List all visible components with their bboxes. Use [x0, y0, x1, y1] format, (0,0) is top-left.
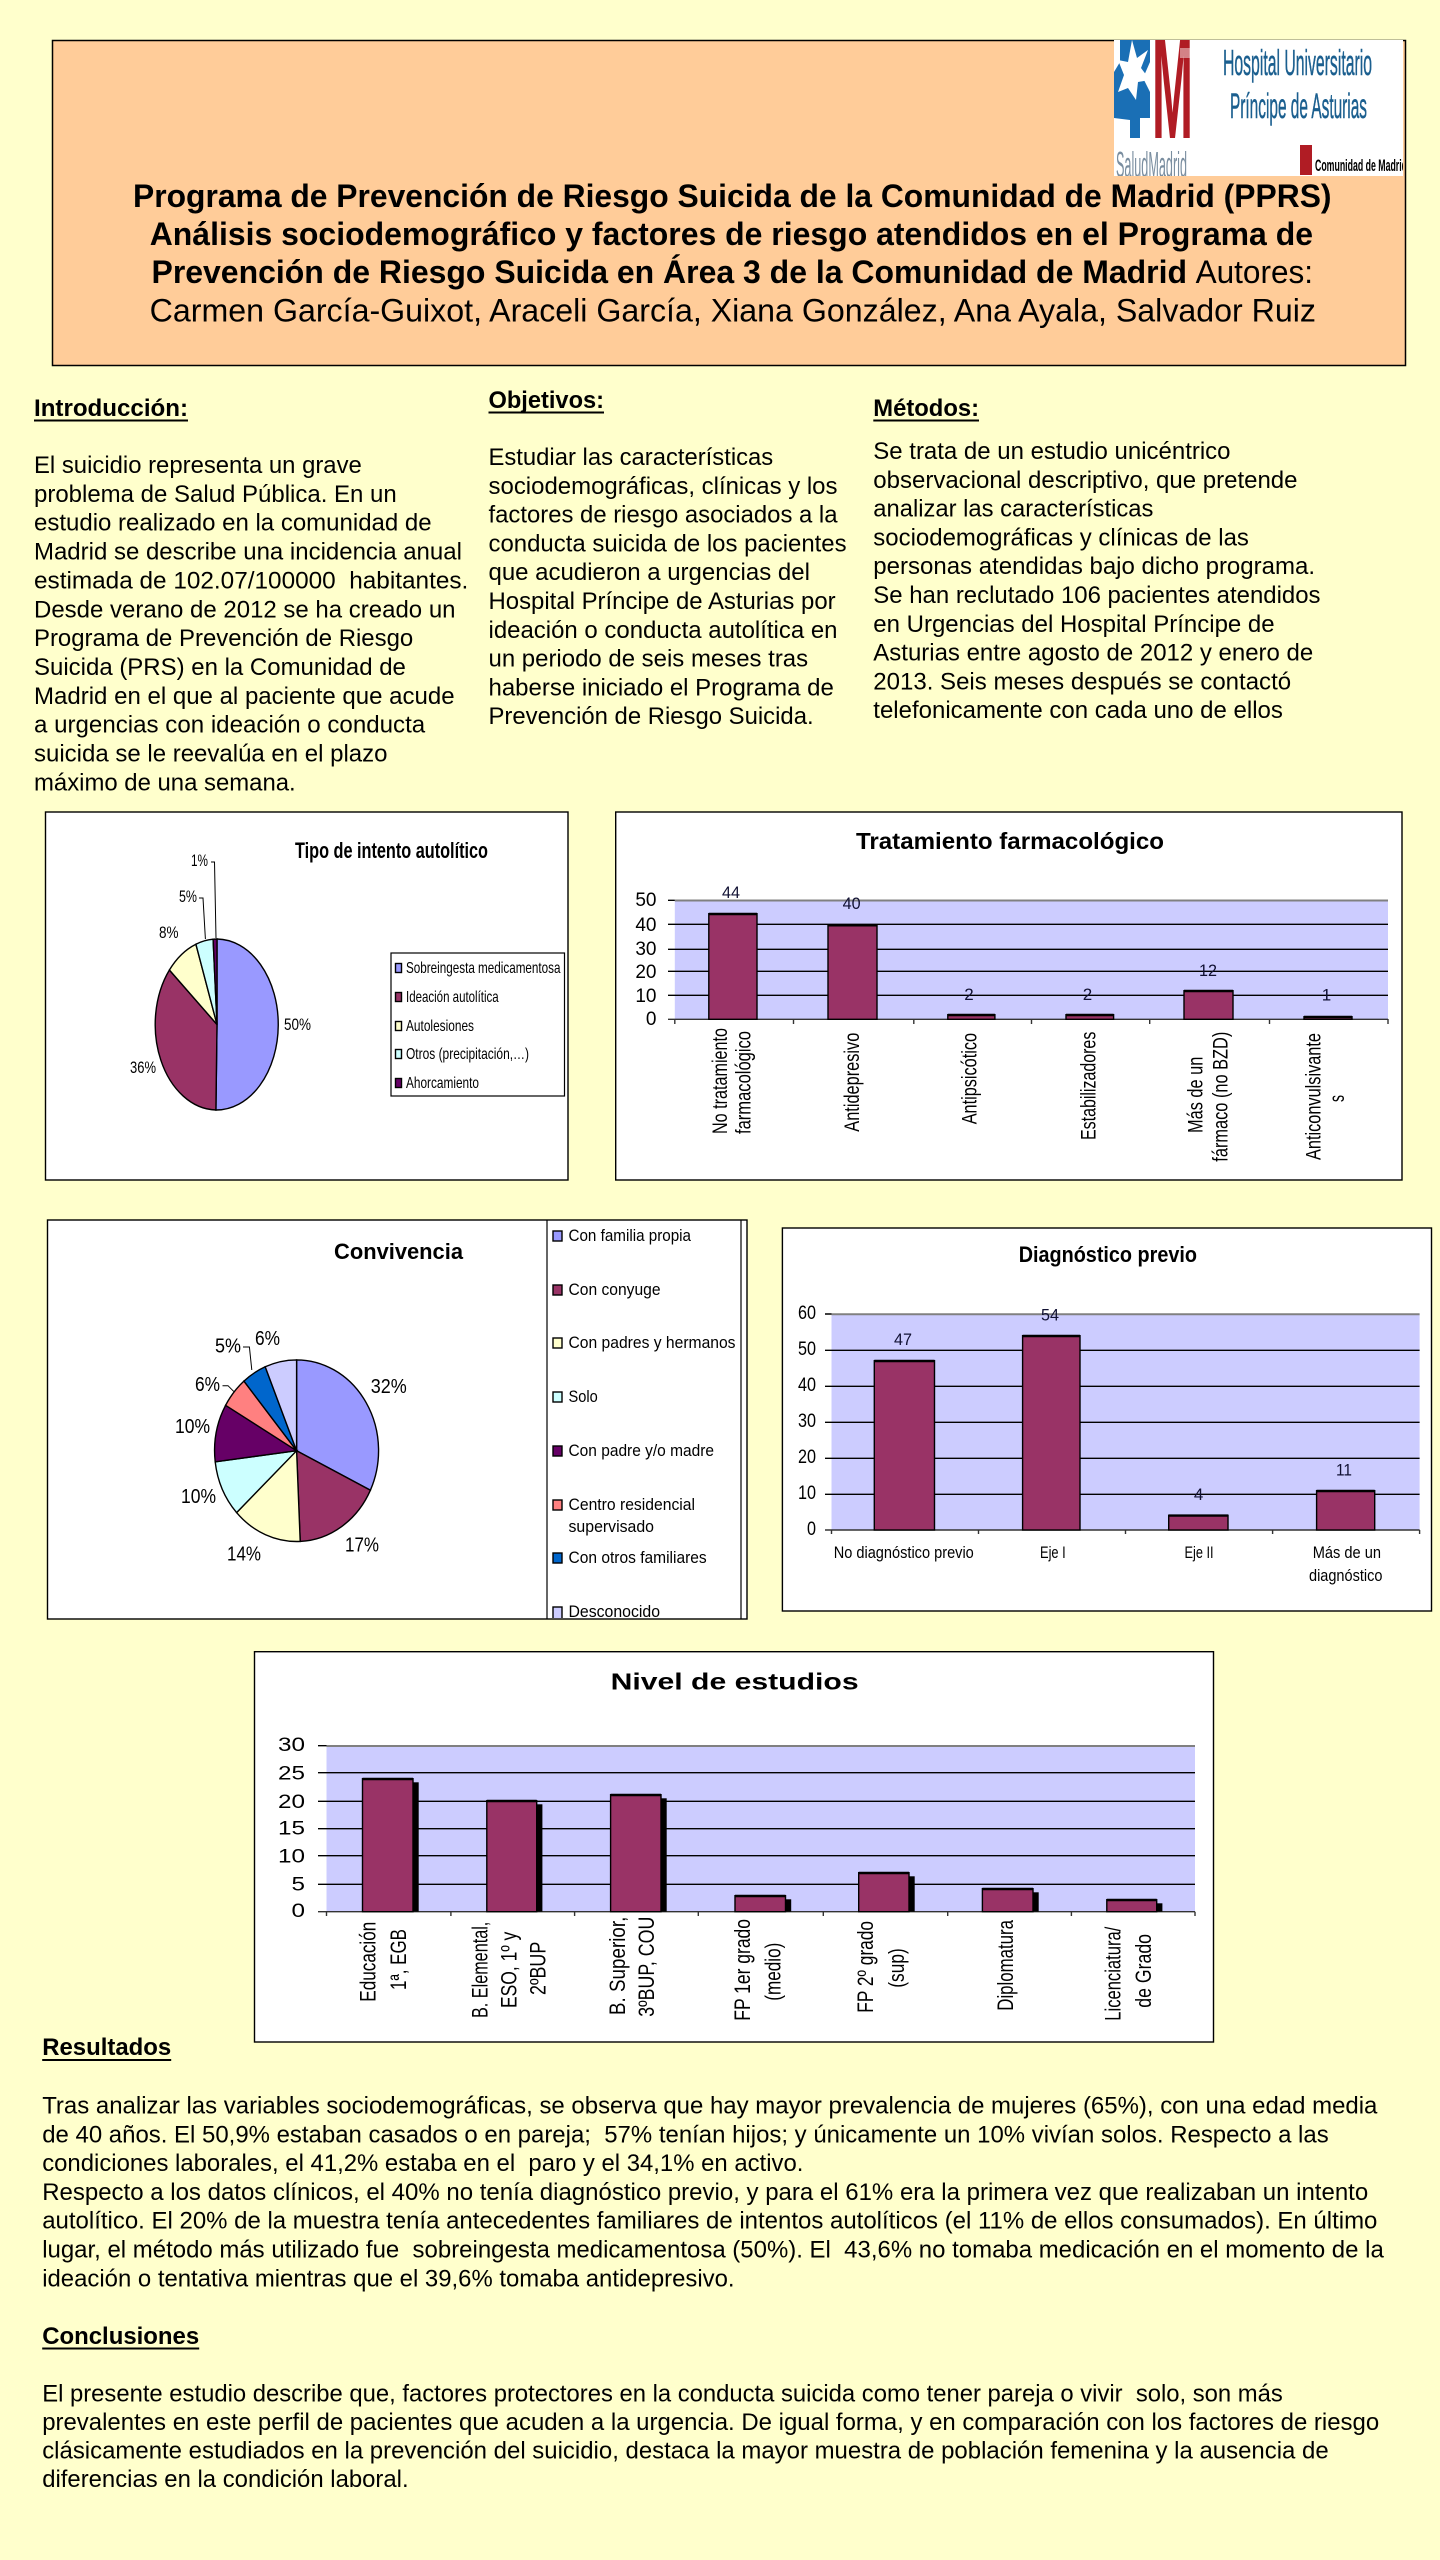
- text block: Introducción: problema de Salud Pública. En un: [34, 481, 397, 508]
- x axis labels: [709, 1028, 1349, 1162]
- title and authors: Prevención de Riesgo Suicida en Área 3 de la Comunidad de Madrid: [152, 254, 1187, 290]
- text block: Objetivos: factores de riesgo asociados a la: [488, 502, 838, 529]
- text block: Resultados: Respecto a los datos clínicos, el 40% no tenía diagnóstico previo, y para el 61% era la primera vez que realizaban un intento: [42, 2179, 1368, 2206]
- chart panel: Diagnóstico previo (bars): Diagnóstico previo: [1019, 1242, 1197, 1267]
- y axis labels: 25: [278, 1764, 305, 1785]
- pie percentage labels: 50%: [284, 1015, 311, 1034]
- x axis labels: ESO, 1º y: [496, 1932, 522, 2008]
- pie percentage labels: 36%: [130, 1058, 156, 1077]
- pie percentage labels: 6%: [255, 1328, 280, 1350]
- chart panel: Tratamiento farmacológico (bars): Tratamiento farmacológico: [856, 828, 1164, 854]
- y axis labels: 20: [798, 1447, 816, 1468]
- x axis labels: fármaco (no BZD): [1210, 1032, 1233, 1162]
- pie percentage labels: [130, 851, 311, 1077]
- x axis labels: diagnóstico: [1309, 1566, 1382, 1585]
- pie percentage labels: 5%: [179, 887, 197, 906]
- y axis labels: 10: [798, 1483, 816, 1504]
- legend: Ahorcamiento: [406, 1075, 479, 1092]
- pie percentage labels: 5%: [215, 1336, 241, 1358]
- y axis labels: 40: [798, 1375, 816, 1396]
- legend: Centro residencial: [568, 1495, 695, 1514]
- x axis labels: Más de un: [1184, 1057, 1208, 1133]
- value labels: 4: [1194, 1485, 1203, 1504]
- y axis labels: 30: [635, 939, 656, 960]
- text block: Objetivos: conducta suicida de los pacientes: [488, 530, 847, 557]
- x axis labels: Eje II: [1184, 1543, 1214, 1562]
- chart panel: Convivencia (pie): [48, 1220, 747, 1621]
- bar shadows: [413, 1782, 1162, 1912]
- pie percentage labels: 10%: [181, 1486, 216, 1508]
- x axis labels: Diplomatura: [993, 1919, 1018, 2011]
- text block: Métodos: [873, 395, 1320, 724]
- legend: Sobreingesta medicamentosa: [406, 960, 561, 977]
- plot area and grid: [668, 900, 1388, 1024]
- x axis labels: farmacológico: [733, 1031, 756, 1134]
- x axis labels: 2ºBUP: [526, 1942, 551, 1995]
- pie percentage labels: 8%: [159, 923, 178, 942]
- text block: Introducción: estudio realizado en la comunidad de: [34, 510, 432, 537]
- chart panel: Tipo de intento autolítico (pie): Tipo de intento autolítico: [295, 838, 488, 863]
- logo: hospital and Comunidad de Madrid: [1114, 40, 1403, 176]
- text block: Introducción: Madrid en el que al paciente que acude: [34, 683, 455, 710]
- pie slices: [155, 939, 278, 1110]
- text block: Introducción: Desde verano de 2012 se ha creado un: [34, 596, 456, 623]
- x axis labels: Licenciatura/: [1101, 1926, 1126, 2021]
- x axis labels: Antipsicótico: [959, 1033, 982, 1124]
- text block: Introducción: estimada de 102.07/100000 habitantes.: [34, 567, 468, 594]
- legend: Otros (precipitación,…): [406, 1046, 529, 1063]
- x axis labels: B. Superior,: [605, 1917, 630, 2015]
- text block: Métodos: personas atendidas bajo dicho programa.: [873, 553, 1315, 580]
- header panel: [52, 7, 1407, 366]
- text block: Conclusiones: Conclusiones: [42, 2323, 199, 2350]
- title and authors: Análisis sociodemográfico y factores de riesgo atendidos en el Programa de: [150, 216, 1313, 252]
- logo: hospital and Comunidad de Madrid: M: [1152, 7, 1193, 169]
- bars: [709, 914, 1352, 1019]
- value labels: 11: [1336, 1461, 1352, 1480]
- y axis labels: [635, 890, 656, 1030]
- value labels: 1: [1322, 986, 1331, 1005]
- legend: Con familia propia: [568, 1226, 691, 1245]
- pie percentage labels: 32%: [371, 1376, 407, 1398]
- pie percentage labels: 17%: [345, 1535, 379, 1557]
- text block: Métodos: analizar las características: [873, 496, 1153, 523]
- chart panel: Diagnóstico previo (bars): [782, 1228, 1432, 1611]
- bars: [362, 1779, 1157, 1912]
- chart panel: Tipo de intento autolítico (pie): [46, 812, 568, 1180]
- y axis labels: 0: [807, 1519, 816, 1540]
- text block: Métodos: Asturias entre agosto de 2012 y enero de: [873, 640, 1313, 667]
- x axis labels: s: [1326, 1095, 1349, 1102]
- text block: Resultados: autolítico. El 20% de la muestra tenía antecedentes familiares de intentos autolíticos (el 11% de ellos consumados). En último: [42, 2208, 1377, 2235]
- pie slices: [215, 1360, 379, 1541]
- y axis labels: [278, 1735, 305, 1922]
- text block: Resultados: ideación o tentativa mientras que el 39,6% tomaba antidepresivo.: [42, 2265, 735, 2292]
- text block: Métodos: Métodos:: [873, 395, 979, 422]
- y axis labels: [798, 1303, 816, 1540]
- text block: Resultados: [42, 2034, 1384, 2292]
- value labels: 40: [843, 894, 861, 913]
- x axis labels: Educación: [356, 1922, 381, 2002]
- text block: Conclusiones: [42, 2323, 1379, 2493]
- text block: Resultados: lugar, el método más utilizado fue sobreingesta medicamentosa (50%). El 43,6% no tomaba medicación en el momento de la: [42, 2236, 1384, 2264]
- text block: Objetivos: sociodemográficas, clínicas y los: [488, 473, 838, 500]
- y axis labels: 50: [635, 890, 656, 911]
- text block: Introducción: Madrid se describe una incidencia anual: [34, 539, 462, 566]
- text block: Introducción: suicida se le reevalúa en el plazo: [34, 740, 388, 768]
- y axis labels: 40: [635, 915, 656, 936]
- y axis labels: 30: [278, 1735, 305, 1756]
- x axis labels: (medio): [760, 1943, 785, 2001]
- text block: Métodos: en Urgencias del Hospital Príncipe de: [873, 611, 1275, 638]
- value labels: 44: [722, 883, 740, 902]
- value labels: 2: [1083, 985, 1092, 1004]
- plot area and grid: [825, 1314, 1420, 1534]
- legend: [553, 1226, 736, 1621]
- text block: Métodos: Se han reclutado 106 pacientes atendidos: [873, 582, 1320, 609]
- x axis labels: 1ª, EGB: [386, 1929, 411, 1990]
- legend: Con otros familiares: [568, 1548, 707, 1567]
- y axis labels: 0: [646, 1009, 656, 1030]
- y axis labels: 20: [278, 1792, 305, 1813]
- text block: Conclusiones: El presente estudio describe que, factores protectores en la conducta suicida como tener pareja o vivir solo, son más: [42, 2380, 1283, 2408]
- x axis labels: FP 1er grado: [730, 1919, 755, 2021]
- legend: supervisado: [568, 1517, 654, 1536]
- value labels: [894, 1306, 1352, 1504]
- x axis labels: [834, 1543, 1382, 1585]
- x axis labels: No diagnóstico previo: [834, 1543, 974, 1562]
- text block: Objetivos: Estudiar las características: [488, 444, 773, 471]
- pie percentage labels: 14%: [227, 1544, 261, 1566]
- legend: Autolesiones: [406, 1018, 474, 1035]
- x axis labels: (sup): [884, 1948, 909, 1988]
- x axis labels: No tratamiento: [709, 1028, 732, 1134]
- legend: [391, 953, 564, 1096]
- chart panel: Tratamiento farmacológico (bars): [616, 812, 1402, 1180]
- legend: Con conyuge: [568, 1280, 660, 1299]
- title and authors: Programa de Prevención de Riesgo Suicida de la Comunidad de Madrid (PPRS): [133, 178, 1332, 214]
- legend: Ideación autolítica: [406, 989, 499, 1006]
- pie percentage labels: [175, 1328, 407, 1566]
- text block: Métodos: observacional descriptivo, que pretende: [873, 467, 1298, 494]
- value labels: 12: [1199, 961, 1217, 980]
- text block: Introducción: a urgencias con ideación o conducta: [34, 712, 426, 739]
- legend: Con padres y hermanos: [568, 1333, 736, 1352]
- legend: Con padre y/o madre: [568, 1441, 714, 1460]
- value labels: 47: [894, 1330, 912, 1349]
- text block: Introducción: [34, 395, 468, 796]
- title and authors: Autores:: [1196, 254, 1313, 290]
- text block: Introducción: Introducción:: [34, 395, 188, 422]
- text block: Introducción: máximo de una semana.: [34, 769, 296, 796]
- text block: Resultados: Tras analizar las variables sociodemográficas, se observa que hay mayor prevalencia de mujeres (65%), con una edad media: [42, 2093, 1378, 2120]
- text block: Métodos: sociodemográficas y clínicas de las: [873, 524, 1249, 551]
- y axis labels: 10: [635, 986, 656, 1007]
- x axis labels: Antidepresivo: [841, 1033, 864, 1132]
- y axis labels: 5: [292, 1874, 305, 1895]
- bars: [874, 1336, 1375, 1530]
- x axis labels: Anticonvulsivante: [1303, 1033, 1326, 1160]
- text block: Introducción: Programa de Prevención de Riesgo: [34, 625, 413, 652]
- text block: Conclusiones: prevalentes en este perfil de pacientes que acuden a la urgencia. De igual forma, y en comparación con los factores de riesgo: [42, 2409, 1379, 2436]
- pie percentage labels: 1%: [191, 851, 208, 870]
- pie percentage labels: 10%: [175, 1416, 210, 1438]
- legend: Desconocido: [568, 1602, 660, 1621]
- plot area and grid: [318, 1746, 1195, 1916]
- chart panel: Nivel de estudios (bars): Nivel de estudios: [611, 1668, 859, 1694]
- text block: Introducción: Suicida (PRS) en la Comunidad de: [34, 654, 406, 681]
- text block: Introducción: El suicidio representa un grave: [34, 452, 362, 479]
- y axis labels: 15: [278, 1819, 305, 1840]
- x axis labels: 3ºBUP, COU: [634, 1917, 659, 2017]
- title and authors: Carmen García-Guixot, Araceli García, Xiana González, Ana Ayala, Salvador Ruiz: [150, 293, 1316, 329]
- value labels: 2: [964, 985, 974, 1004]
- title and authors: [133, 178, 1332, 329]
- y axis labels: 20: [635, 962, 656, 983]
- value labels: 54: [1041, 1306, 1059, 1325]
- y axis labels: 10: [278, 1846, 305, 1867]
- text block: Conclusiones: clásicamente estudiados en la prevención del suicidio, destaca la mayor muestra de población femenina y la ausencia de: [42, 2438, 1329, 2464]
- value labels: [722, 883, 1331, 1005]
- text block: Objetivos: Hospital Príncipe de Asturias por: [488, 588, 836, 615]
- x axis labels: Eje I: [1040, 1543, 1066, 1562]
- chart panel: Convivencia (pie): Convivencia: [334, 1239, 464, 1264]
- text block: Objetivos: un periodo de seis meses tras: [488, 646, 808, 673]
- chart panel: Nivel de estudios (bars): [254, 1652, 1214, 2042]
- x axis labels: B. Elemental,: [468, 1922, 492, 2018]
- text block: Resultados: condiciones laborales, el 41,2% estaba en el paro y el 34,1% en activo.: [42, 2150, 803, 2177]
- x axis labels: Estabilizadores: [1077, 1032, 1100, 1140]
- text block: Objetivos: Objetivos:: [488, 387, 604, 414]
- text block: Métodos: Se trata de un estudio unicéntrico: [873, 438, 1230, 465]
- text block: Métodos: 2013. Seis meses después se contactó: [873, 668, 1291, 695]
- pie percentage labels: 6%: [195, 1374, 220, 1396]
- text block: Objetivos: Prevención de Riesgo Suicida.: [488, 703, 814, 730]
- x axis labels: de Grado: [1131, 1934, 1156, 2008]
- text block: Resultados: de 40 años. El 50,9% estaban casados o en pareja; 57% tenían hijos; y únicamente un 10% vivían solos. Respecto a las: [42, 2122, 1329, 2148]
- y axis labels: 30: [798, 1411, 816, 1432]
- text block: Conclusiones: diferencias en la condición laboral.: [42, 2466, 409, 2493]
- text block: Objetivos: que acudieron a urgencias del: [488, 559, 810, 586]
- y axis labels: 60: [798, 1303, 816, 1324]
- x axis labels: Más de un: [1313, 1543, 1381, 1562]
- text block: Objetivos: haberse iniciado el Programa de: [488, 674, 834, 701]
- legend: Solo: [568, 1387, 598, 1406]
- text block: Objetivos: [488, 387, 847, 730]
- x axis labels: FP 2º grado: [853, 1921, 878, 2013]
- text block: Resultados: Resultados: [42, 2034, 171, 2061]
- y axis labels: 0: [292, 1901, 305, 1922]
- logo: hospital and Comunidad de Madrid: SaludMadrid: [1116, 144, 1187, 185]
- y axis labels: 50: [798, 1339, 816, 1360]
- x axis labels: [356, 1917, 1156, 2021]
- text block: Objetivos: ideación o conducta autolítica en: [488, 617, 838, 644]
- text block: Métodos: telefonicamente con cada uno de ellos: [873, 697, 1283, 724]
